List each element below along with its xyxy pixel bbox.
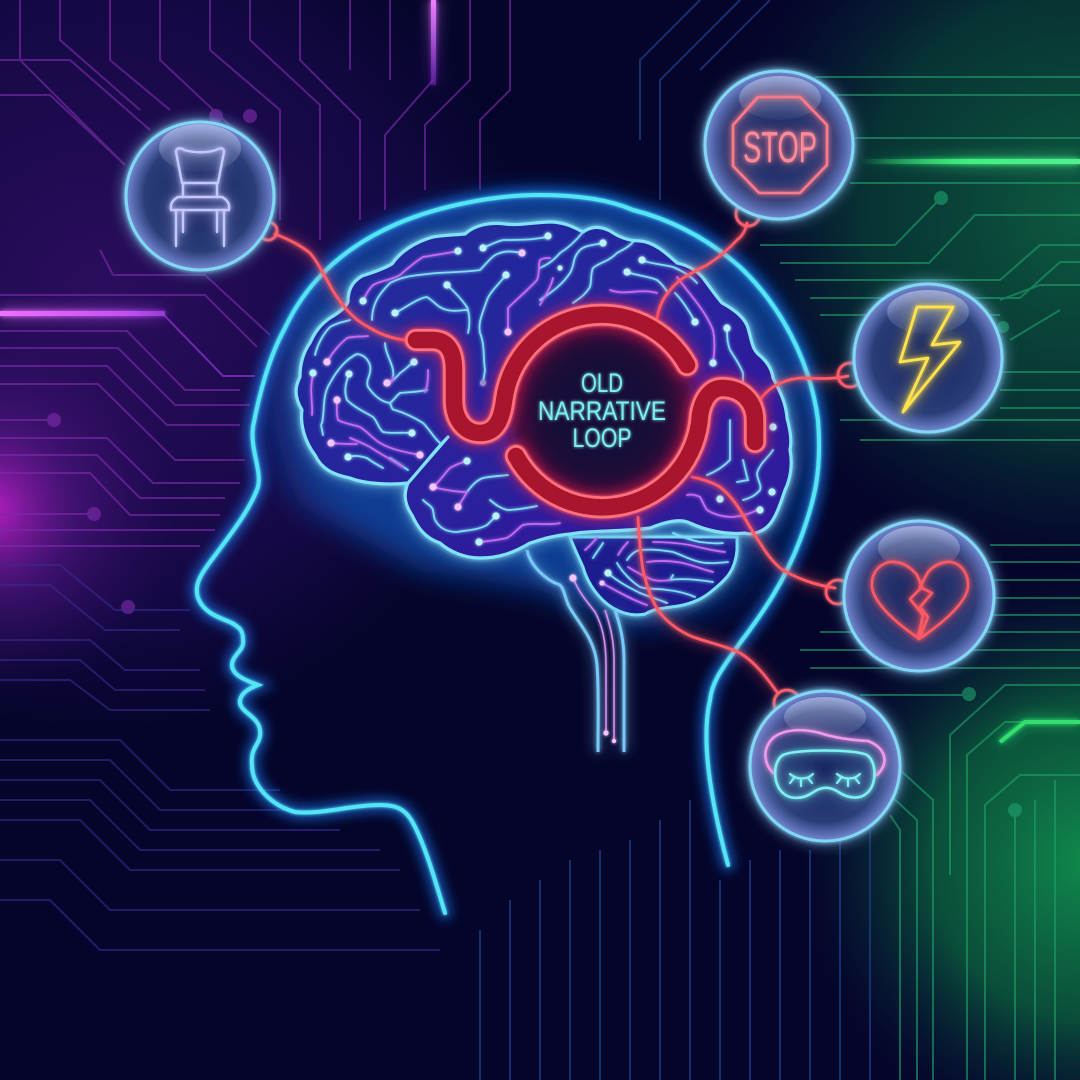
loop core — [508, 318, 696, 506]
circuit traces: green right — [760, 77, 1080, 1080]
head outline — [197, 195, 819, 913]
brain: cerebrum outline — [296, 222, 791, 558]
circuit traces: blue top right and bottom — [480, 0, 870, 1080]
brain: neuron dots — [309, 232, 777, 743]
wire: lightning — [760, 376, 848, 400]
brain: stem fibres — [573, 578, 614, 740]
tube: upper arc — [416, 315, 687, 433]
light streak: left purple — [0, 311, 165, 316]
light streak: right green upper — [860, 159, 1080, 164]
panel: stop bubble — [705, 71, 853, 219]
blue glow around brain — [255, 195, 819, 630]
circuit traces: violet lower left — [0, 565, 440, 950]
icon: chair — [171, 148, 229, 246]
tube: red halo — [416, 315, 755, 507]
wire: sleep mask — [638, 517, 777, 692]
wire: stop — [657, 223, 747, 318]
loop label: OLD — [581, 368, 623, 398]
wire: chair — [275, 234, 413, 341]
connector rings — [259, 202, 862, 716]
brain: pink folds — [311, 251, 757, 605]
panel: broken heart bubble — [844, 521, 994, 671]
brain — [296, 222, 791, 752]
icon: lightning bolt — [900, 307, 960, 412]
panel: lightning bubble — [854, 284, 1002, 432]
icon: stop sign: STOP — [743, 123, 817, 172]
loop label — [538, 368, 666, 453]
light streak: right green lower — [1000, 722, 1080, 742]
panel: sleep mask bubble — [750, 691, 900, 841]
old narrative loop tube — [416, 315, 755, 507]
loop label: LOOP — [572, 423, 632, 453]
icon: broken heart — [872, 562, 968, 639]
brain: brain stem — [527, 550, 624, 752]
icon: stop sign — [733, 97, 827, 193]
red connector wires — [275, 223, 848, 692]
loop label: NARRATIVE — [538, 396, 666, 426]
brain: blue folds — [315, 232, 773, 603]
tube: lower arc — [516, 388, 755, 507]
icon: sleep mask — [765, 730, 884, 798]
light streak: top purple — [431, 0, 436, 85]
wire: heart — [692, 477, 835, 588]
brain: cerebellum — [570, 537, 737, 615]
panel: chair bubble — [126, 122, 274, 270]
circuit traces: purple left — [0, 0, 510, 613]
